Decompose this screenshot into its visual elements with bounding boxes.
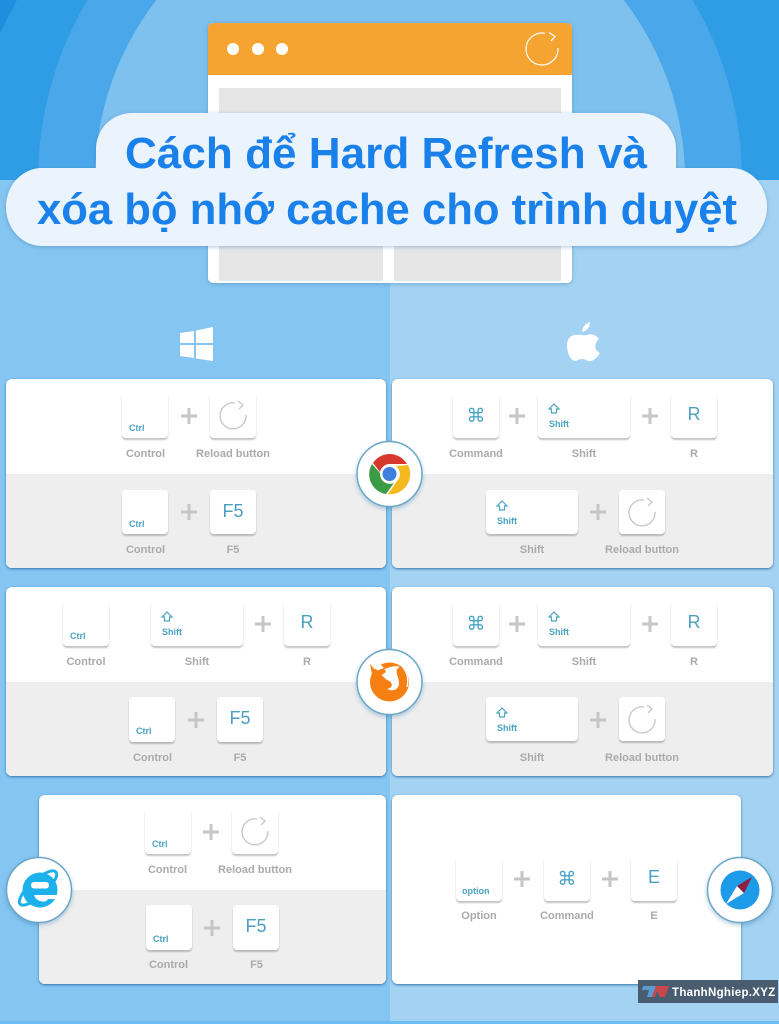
key: R: R [688, 404, 700, 424]
key: reload [232, 809, 278, 854]
caption: row 1: Shift [572, 656, 597, 668]
caption: row 1 [449, 656, 698, 668]
key: shift [538, 393, 630, 438]
caption: row 1 [126, 448, 270, 460]
watermark [638, 980, 778, 1003]
key: F5: F5 [229, 708, 251, 728]
key: R: R [300, 612, 314, 632]
caption: row 1: Command [449, 656, 503, 668]
caption: row 2 [149, 959, 263, 971]
panel: safari mac [392, 795, 741, 984]
caption: row 2: Control [126, 544, 165, 556]
browser window illustration [208, 23, 572, 283]
title [6, 113, 767, 246]
key: F5 [217, 697, 263, 742]
key: shift: Shift [497, 516, 517, 526]
key: R [671, 393, 717, 438]
icon: safari badge [708, 858, 772, 922]
key: ctrl: Ctrl [136, 726, 152, 736]
caption: row 2: F5 [250, 959, 263, 971]
key: ctrl [145, 809, 191, 854]
key: shift: Shift [549, 419, 569, 429]
caption: row 1: R [303, 656, 311, 668]
key: command: ⌘ [466, 613, 486, 635]
watermark logo [642, 986, 669, 997]
key: shift [486, 697, 578, 741]
key: ctrl: Ctrl [153, 934, 168, 944]
key: ctrl [63, 601, 109, 646]
title text: xóa bộ nhớ cache cho trình duyệt [37, 185, 737, 234]
title pill [6, 113, 767, 246]
key: ctrl [146, 905, 192, 950]
caption: row 1: Reload button [196, 448, 270, 460]
caption: row 2 [133, 752, 246, 764]
caption: row 1: Command [449, 448, 503, 460]
key: command [544, 856, 590, 901]
key: F5: F5 [222, 501, 244, 521]
caption: row 2: Reload button [605, 752, 679, 764]
caption: row 1: Shift [572, 448, 597, 460]
key: shift [151, 601, 243, 646]
key: ctrl: Ctrl [70, 631, 86, 641]
caption: row 2: Control [149, 959, 188, 971]
key: shift [486, 490, 578, 534]
key: command [453, 393, 499, 438]
icon: chrome badge [357, 442, 422, 506]
caption: row 1: Control [126, 448, 165, 460]
panel: chrome windows [6, 379, 386, 568]
key: ctrl [122, 490, 168, 534]
caption: row 1 [449, 448, 698, 460]
caption: row 1: Shift [185, 656, 210, 668]
caption: row 2: F5 [227, 544, 239, 556]
key: reload [619, 490, 665, 534]
key: R: R [688, 612, 700, 632]
key: ctrl [122, 393, 168, 438]
caption: row 1: Control [66, 656, 106, 668]
window reload icon [526, 32, 558, 65]
key: shift [538, 601, 630, 646]
panel: firefox mac [392, 587, 773, 776]
key: shift: Shift [162, 627, 182, 637]
caption: row 2 [520, 752, 679, 764]
caption: row 2 [520, 544, 679, 556]
key: F5 [233, 905, 279, 950]
caption: row: Option [461, 910, 497, 922]
caption: row 2: F5 [234, 752, 246, 764]
panel: internet explorer windows [39, 795, 386, 984]
caption: row: E [650, 910, 658, 922]
caption: row 2: Shift [520, 544, 545, 556]
key: R [284, 601, 330, 646]
key: reload [619, 697, 665, 741]
key: ctrl: Ctrl [129, 519, 144, 529]
caption: row 2: Control [133, 752, 172, 764]
icon: firefox badge [357, 650, 422, 714]
watermark text: ThanhNghiep.XYZ [672, 987, 776, 999]
caption: row 2 [126, 544, 239, 556]
icon: internet explorer badge [6, 858, 72, 922]
caption: row 1: Reload button [218, 864, 292, 876]
window title bar [208, 23, 572, 75]
panel: firefox windows [6, 587, 386, 776]
icon: apple logo [567, 322, 600, 361]
key: ctrl: Ctrl [152, 839, 168, 849]
key: command: ⌘ [466, 405, 486, 427]
key: command [453, 601, 499, 646]
key: option [456, 856, 502, 901]
panel: chrome mac [392, 379, 773, 568]
key: command: ⌘ [558, 868, 576, 890]
key: E [631, 856, 677, 901]
caption: row 1 [148, 864, 292, 876]
window dots [227, 43, 288, 55]
key: option: option [462, 886, 490, 896]
title text [37, 129, 737, 234]
key: ctrl: Ctrl [129, 423, 144, 433]
icon: windows logo [180, 327, 213, 361]
caption: row 1: Control [148, 864, 187, 876]
key: E: E [648, 867, 660, 887]
caption: row 2: Shift [520, 752, 545, 764]
key: shift: Shift [549, 627, 569, 637]
caption: row [461, 910, 658, 922]
caption: row 2: Reload button [605, 544, 679, 556]
key: F5: F5 [245, 916, 267, 936]
caption: row 1 [66, 656, 311, 668]
key: reload [210, 393, 256, 438]
title text: Cách để Hard Refresh và [125, 129, 648, 178]
key: shift: Shift [497, 723, 517, 733]
caption: row 1: R [690, 656, 698, 668]
key: R [671, 601, 717, 646]
key: ctrl [129, 697, 175, 742]
window content blocks [219, 88, 561, 281]
caption: row: Command [540, 910, 594, 922]
caption: row 1: R [690, 448, 698, 460]
key: F5 [210, 490, 256, 534]
